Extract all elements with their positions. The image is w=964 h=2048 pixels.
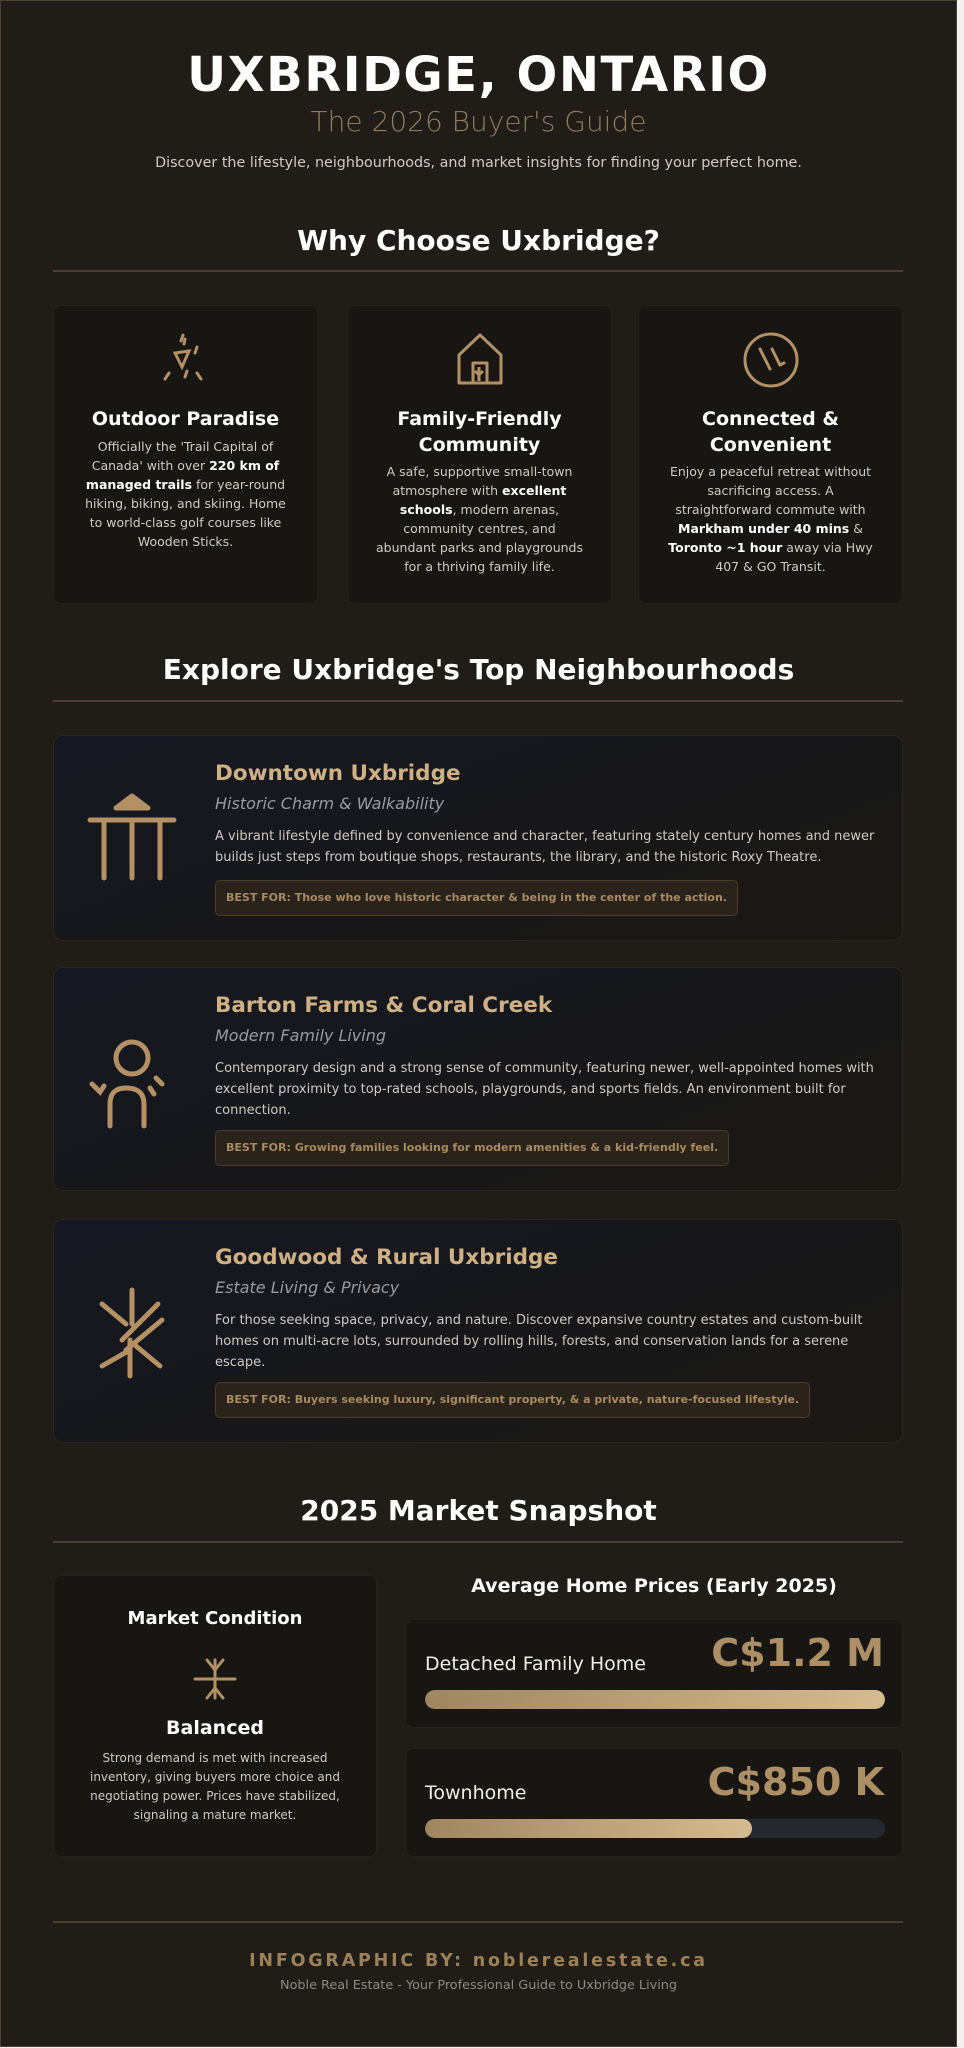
best for [215, 1382, 810, 1418]
panel: downtown uxbridge [53, 735, 903, 941]
panel: connected [638, 305, 903, 604]
bar: townhome [405, 1748, 903, 1857]
tagline: Discover the lifestyle, neighbourhoods, and market insights for finding your perfect home. [155, 155, 802, 171]
icon: person [90, 1040, 164, 1128]
card title: Community [419, 434, 540, 456]
subtitle: Modern Family Living [215, 1026, 386, 1045]
bar: townhome: Townhome [425, 1782, 526, 1804]
panel: family-friendly [347, 305, 612, 604]
title: Barton Farms & Coral Creek [215, 993, 552, 1018]
bar: townhome: C$850 K [708, 1760, 884, 1804]
card title [702, 408, 839, 456]
footer tagline: Noble Real Estate - Your Professional Guide to Uxbridge Living [280, 1978, 677, 1993]
best for: BEST FOR: Those who love historic character & being in the center of the action. [226, 891, 727, 904]
description: For those seeking space, privacy, and nature. Discover expansive country estates and custom-built homes on multi-acre lots, surrounded by rolling hills, forests, and conservation lands for a serene escape. [215, 1313, 862, 1370]
description: Strong demand is met with increased inventory, giving buyers more choice and negotiating power. Prices have stabilized, signaling a mature market. [90, 1751, 340, 1822]
panel: outdoor paradise [53, 305, 318, 604]
best for [215, 880, 738, 916]
heading: market snapshot: 2025 Market Snapshot [300, 1494, 657, 1527]
card title: Outdoor Paradise [92, 408, 279, 430]
subtitle: The 2026 Buyer's Guide [311, 105, 646, 138]
description: Contemporary design and a strong sense of community, featuring newer, well-appointed homes with excellent proximity to top-rated schools, playgrounds, and sports fields. An environment built for connection. [215, 1061, 874, 1118]
heading: why choose: Why Choose Uxbridge? [297, 224, 660, 257]
title: Downtown Uxbridge [215, 761, 461, 786]
panel: barton farms [53, 967, 903, 1191]
icon: crossed lines [100, 1288, 164, 1378]
bar: detached [405, 1619, 903, 1728]
icon: balance [194, 1658, 236, 1700]
best for: BEST FOR: Growing families looking for modern amenities & a kid-friendly feel. [226, 1141, 718, 1154]
card title [397, 408, 562, 456]
card text: A safe, supportive small-town atmosphere with excellent schools, modern arenas, community centres, and abundant parks and playgrounds for a thriving family life. [376, 464, 583, 574]
description: A vibrant lifestyle defined by convenience and character, featuring stately century homes and newer builds just steps from boutique shops, restaurants, the library, and the historic Roxy Theatre. [215, 829, 874, 865]
card title: Connected & [702, 408, 839, 430]
icon: outdoor [163, 334, 202, 381]
heading: neighbourhoods: Explore Uxbridge's Top Neighbourhoods [163, 653, 794, 686]
card text: Enjoy a peaceful retreat without sacrificing access. A straightforward commute with Markham under 40 mins & Toronto ~1 hour away via Hwy 407 & GO Transit. [668, 464, 873, 574]
icon: temple [88, 794, 176, 880]
card title: Family-Friendly [397, 408, 562, 430]
chart heading: Average Home Prices (Early 2025) [471, 1575, 837, 1597]
heading: Market Condition [128, 1608, 302, 1629]
title: UXBRIDGE, ONTARIO [187, 47, 770, 103]
subtitle: Historic Charm & Walkability [215, 794, 444, 813]
card text: Officially the 'Trail Capital of Canada' with over 220 km of managed trails for year-round hiking, biking, and skiing. Home to world-class golf courses like Wooden Sticks. [85, 439, 286, 549]
title: Goodwood & Rural Uxbridge [215, 1245, 558, 1270]
best for [215, 1130, 729, 1166]
bar: detached: Detached Family Home [425, 1653, 646, 1675]
card title: Convenient [710, 434, 831, 456]
footer credit: INFOGRAPHIC BY: noblerealestate.ca [249, 1951, 708, 1971]
panel: market condition [53, 1575, 377, 1857]
icon: house [458, 333, 502, 384]
subtitle: Estate Living & Privacy [215, 1278, 399, 1297]
status: Balanced [166, 1717, 264, 1739]
panel: goodwood [53, 1219, 903, 1443]
bar: detached: C$1.2 M [711, 1631, 884, 1675]
icon: clock [744, 332, 798, 388]
best for: BEST FOR: Buyers seeking luxury, significant property, & a private, nature-focused lifestyle. [226, 1393, 799, 1406]
